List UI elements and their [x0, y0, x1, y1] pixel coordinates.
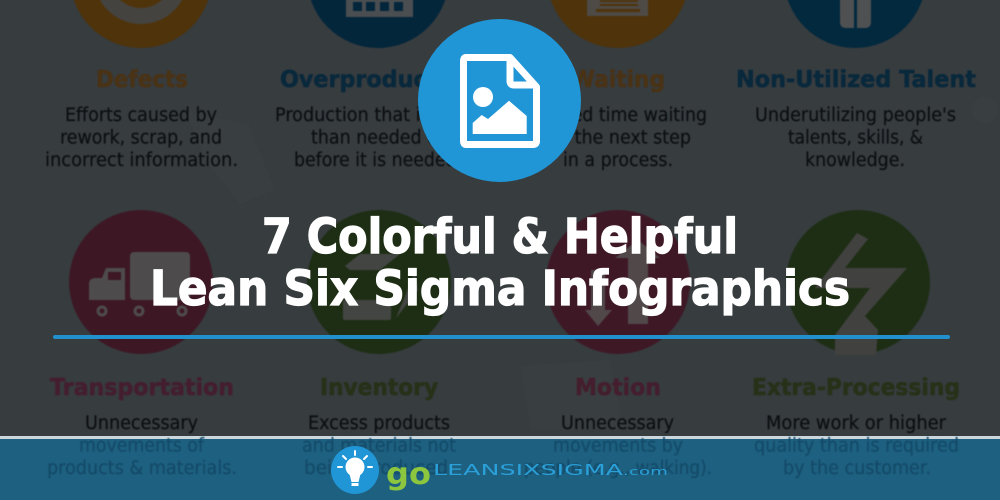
logo word: go: go — [386, 457, 431, 492]
logo word: LEANSIXSIGMA.com — [433, 461, 668, 479]
icon: lightning bolt — [786, 210, 930, 355]
text: defects description: Efforts caused by — [65, 105, 217, 126]
text: waiting description: Wasted time waiting — [529, 105, 707, 126]
text: defects description — [45, 105, 238, 171]
text: motion description — [524, 413, 712, 479]
panel: defects — [45, 0, 238, 171]
text: non-utilized talent description — [755, 105, 956, 171]
text: inventory description: and materials not — [302, 436, 456, 456]
panel: transportation — [50, 210, 234, 401]
icon: up and down arrows — [546, 210, 690, 354]
icon: target — [70, 0, 212, 48]
title: Lean Six Sigma Infographics — [150, 261, 850, 317]
heading: Overproduction: Overproduction — [280, 67, 476, 93]
panel: overproduction — [275, 0, 481, 171]
heading: Non-Utilized Talent: Non-Utilized Talent — [736, 67, 976, 93]
text: inventory description: Excess products — [308, 413, 450, 434]
footer band — [0, 436, 1000, 500]
logo word: LEANSIXSIGMA.com: .com — [623, 465, 668, 478]
panel: motion — [546, 210, 690, 401]
text: defects description: incorrect information. — [45, 150, 238, 171]
text: motion description: movements by — [553, 436, 683, 456]
text: overproduction description: before it is needed. — [294, 150, 462, 171]
faint background shapes — [185, 96, 999, 430]
text: extra-processing description: by the customer. — [783, 458, 931, 479]
text: motion description: people (e.g., walking). — [524, 458, 712, 479]
text: transportation description: products & materials. — [47, 458, 237, 479]
icon: hourglass — [547, 0, 689, 48]
text: non-utilized talent description: knowledge. — [805, 150, 905, 171]
icon: person — [784, 0, 926, 48]
panel: non-utilized talent — [736, 0, 976, 171]
panel: waiting — [529, 0, 707, 171]
title underline — [53, 335, 950, 339]
text: waiting description: in a process. — [563, 150, 673, 171]
text: lower row descriptions — [47, 413, 959, 479]
text: extra-processing description: quality than is required — [754, 436, 959, 456]
text: inventory description: being produced. — [304, 458, 454, 479]
text: waiting description: for the next step — [545, 128, 691, 148]
text: non-utilized talent description: Underutilizing people's — [755, 105, 956, 126]
panel: extra-processing — [752, 210, 960, 401]
text: transportation description: movements of — [79, 436, 204, 456]
heading: Inventory: Inventory — [320, 375, 438, 401]
text: overproduction description — [275, 105, 481, 171]
logo word: LEANSIXSIGMA.com: LEANSIXSIGMA — [433, 461, 624, 479]
heading: Defects: Defects — [96, 67, 188, 93]
text: motion description: Unnecessary — [561, 413, 674, 434]
heading: Waiting: Waiting — [571, 67, 665, 93]
panel: inventory — [307, 210, 451, 401]
text: waiting description — [529, 105, 707, 171]
icon: image file badge — [418, 19, 581, 182]
text: overproduction description: than needed or — [311, 128, 445, 148]
title: 7 Colorful & Helpful — [262, 209, 738, 265]
text: transportation description — [47, 413, 237, 479]
text: overproduction description: Production that is more — [275, 105, 481, 126]
icon: light bulb — [331, 446, 379, 494]
text: extra-processing description — [754, 413, 959, 479]
text: inventory description — [302, 413, 456, 479]
text: extra-processing description: More work or higher — [766, 413, 946, 434]
icon: keypad — [307, 0, 449, 48]
heading: Motion: Motion — [575, 375, 661, 401]
icon: truck — [69, 210, 213, 354]
title — [150, 209, 850, 317]
icon: inventory box — [307, 210, 451, 354]
text: transportation description: Unnecessary — [85, 413, 198, 434]
heading: Transportation: Transportation — [50, 375, 234, 401]
text: defects description: rework, scrap, and — [60, 128, 222, 148]
heading: Extra-Processing: Extra-Processing — [752, 375, 960, 401]
text: non-utilized talent description: talents, skills, & — [788, 128, 923, 148]
logo: GoLeanSixSigma.com — [331, 446, 668, 494]
